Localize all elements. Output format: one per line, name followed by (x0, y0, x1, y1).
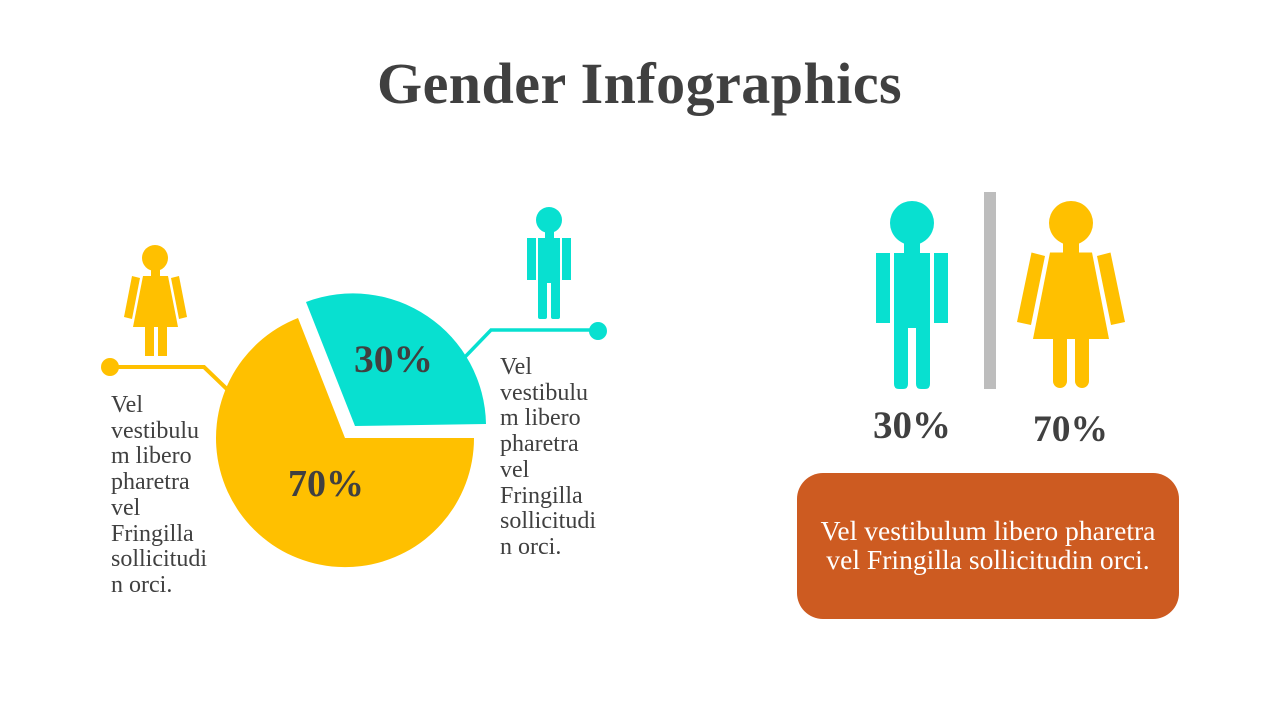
stat: 70%: 70% (1033, 409, 1108, 450)
stat: 30%: 30% (873, 404, 951, 447)
title: Gender Infographics (377, 51, 902, 116)
icon: small male (527, 207, 571, 319)
icon: small female (124, 245, 187, 356)
text block: right: Vel vestibulu m libero pharetra vel Fringilla sollicitudi n orci. (500, 354, 596, 560)
pie slice: 70% (216, 318, 474, 567)
connector: yellow (101, 358, 230, 392)
callout: vel Fringilla sollicitudin orci. (826, 544, 1150, 574)
callout (797, 473, 1179, 619)
pie label 70%: 70% (288, 463, 364, 505)
icon: large male (876, 201, 948, 389)
connector: teal (464, 322, 607, 358)
pie slice: 30% (306, 293, 486, 426)
divider (984, 192, 996, 389)
callout: Vel vestibulum libero pharetra (821, 515, 1155, 546)
pie label 30%: 30% (354, 337, 433, 381)
text block: left: Vel vestibulu m libero pharetra vel Fringilla sollicitudi n orci. (111, 392, 207, 598)
icon: large female (1017, 201, 1125, 388)
